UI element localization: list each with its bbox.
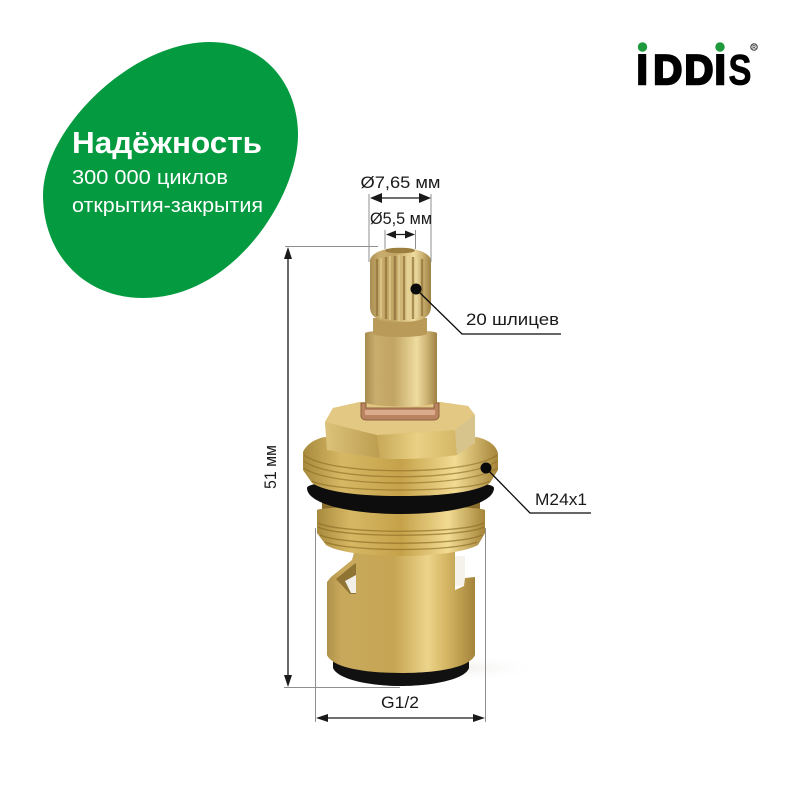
- dimension: G1/2: [316, 528, 486, 722]
- text: open-close: открытия-закрытия: [72, 195, 263, 217]
- left slot: [336, 563, 356, 594]
- lower body: [327, 545, 475, 673]
- dimension: stem inner diameter: [370, 209, 432, 249]
- dimension: stem inner diameter: Ø5,5 мм: [370, 209, 432, 228]
- stem neck: [373, 318, 427, 337]
- callout: 20 splines: 20 шлицев: [466, 310, 559, 329]
- lower thread: [317, 506, 485, 556]
- splined head: [370, 248, 431, 322]
- dimension: total height 51 mm: [261, 246, 400, 688]
- black base seal: [333, 655, 469, 686]
- logo: IDDIS: IDDI: [637, 46, 726, 93]
- logo: IDDIS: R: [752, 45, 756, 51]
- callout: M24x1: M24x1: [535, 490, 587, 509]
- o-ring: [307, 479, 494, 514]
- dimension: G1/2: G1/2: [381, 693, 419, 712]
- hex nut: [325, 402, 475, 459]
- stem collar: [365, 330, 437, 406]
- logo: IDDIS: S: [728, 47, 751, 94]
- callout: 20 splines: [410, 284, 561, 334]
- text: cycle count: 300 000 циклов: [72, 167, 228, 189]
- heading: Надёжность: [72, 125, 262, 160]
- flange with M24 thread: [303, 437, 498, 496]
- dimension: total height 51 mm: 51 мм: [261, 445, 280, 489]
- green callout: reliability: [43, 42, 298, 298]
- dimension: stem outer diameter: Ø7,65 мм: [360, 173, 440, 192]
- white opening behind slots: [455, 556, 465, 586]
- neck behind o-ring: [322, 490, 480, 514]
- callout: M24x1: [480, 462, 591, 513]
- copper clip: [361, 403, 439, 420]
- faucet cartridge photo illustration: [303, 248, 545, 686]
- logo: IDDIS: [637, 42, 757, 94]
- dimension: stem outer diameter: [360, 173, 440, 262]
